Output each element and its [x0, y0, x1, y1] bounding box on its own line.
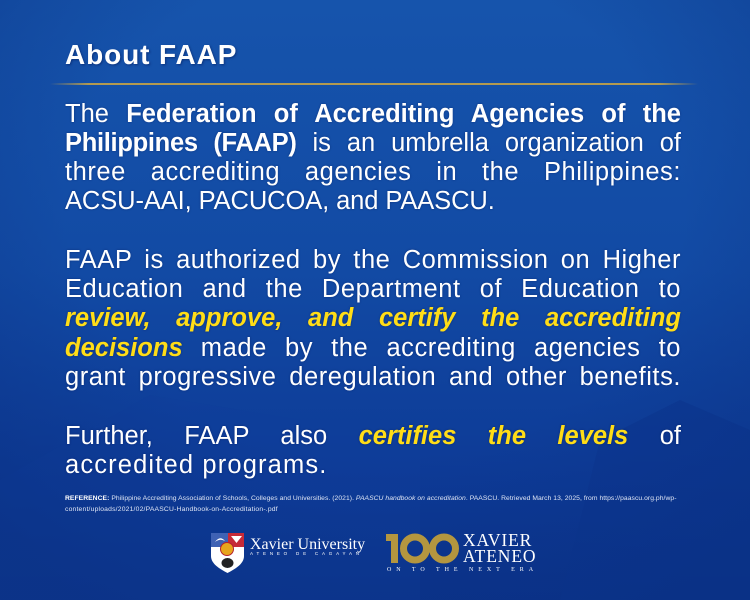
text block: paragraph three	[65, 422, 681, 479]
logo wordmark: ATENEO	[463, 546, 536, 566]
text block: paragraph one: The Federation of Accrediting Agencies of the	[65, 100, 681, 128]
text block: paragraph one	[64, 100, 682, 215]
logo tagline: ATENEO DE CAGAYAN	[250, 551, 363, 556]
text block: paragraph three: accredited programs.	[65, 451, 328, 479]
logo: Xavier Ateneo 100	[386, 530, 538, 573]
logo wordmark	[463, 530, 536, 566]
logo: Xavier University	[211, 533, 366, 573]
gold divider rule	[52, 83, 696, 85]
title: About FAAP	[65, 39, 237, 70]
reference note: content/uploads/2021/02/PAASCU-Handbook-on-Accreditation-.pdf	[65, 506, 278, 512]
text block: paragraph three: Further, FAAP also certifies the levels of	[65, 422, 681, 450]
reference note: REFERENCE: Philippine Accrediting Association of Schools, Colleges and Universities. (2021). PAASCU handbook on accreditation. PAASCU. Retrieved March 13, 2025, from https://paascu.org.ph/wp-	[65, 495, 676, 502]
logo wordmark: XAVIER	[463, 530, 532, 550]
icon: gold 100 infinity mark	[386, 534, 459, 564]
text block: paragraph two: decisions made by the accrediting agencies to	[65, 334, 681, 362]
text block: paragraph two: review, approve, and certify the accrediting	[65, 304, 681, 332]
icon: university shield	[211, 533, 244, 573]
text block: paragraph one: three accrediting agencies in the Philippines:	[65, 158, 681, 186]
text block: paragraph one: ACSU-AAI, PACUCOA, and PAASCU.	[65, 187, 495, 215]
text block: paragraph two	[65, 246, 681, 392]
text block: paragraph two: grant progressive deregulation and other benefits.	[65, 363, 681, 391]
text block: paragraph two: Education and the Department of Education to	[65, 275, 681, 303]
reference note	[65, 495, 676, 512]
logo tagline: ON TO THE NEXT ERA	[387, 567, 538, 573]
logo wordmark: Xavier University	[250, 536, 365, 553]
text block: paragraph one: Philippines (FAAP) is an umbrella organization of	[65, 129, 681, 157]
text block: paragraph two: FAAP is authorized by the Commission on Higher	[65, 246, 681, 274]
